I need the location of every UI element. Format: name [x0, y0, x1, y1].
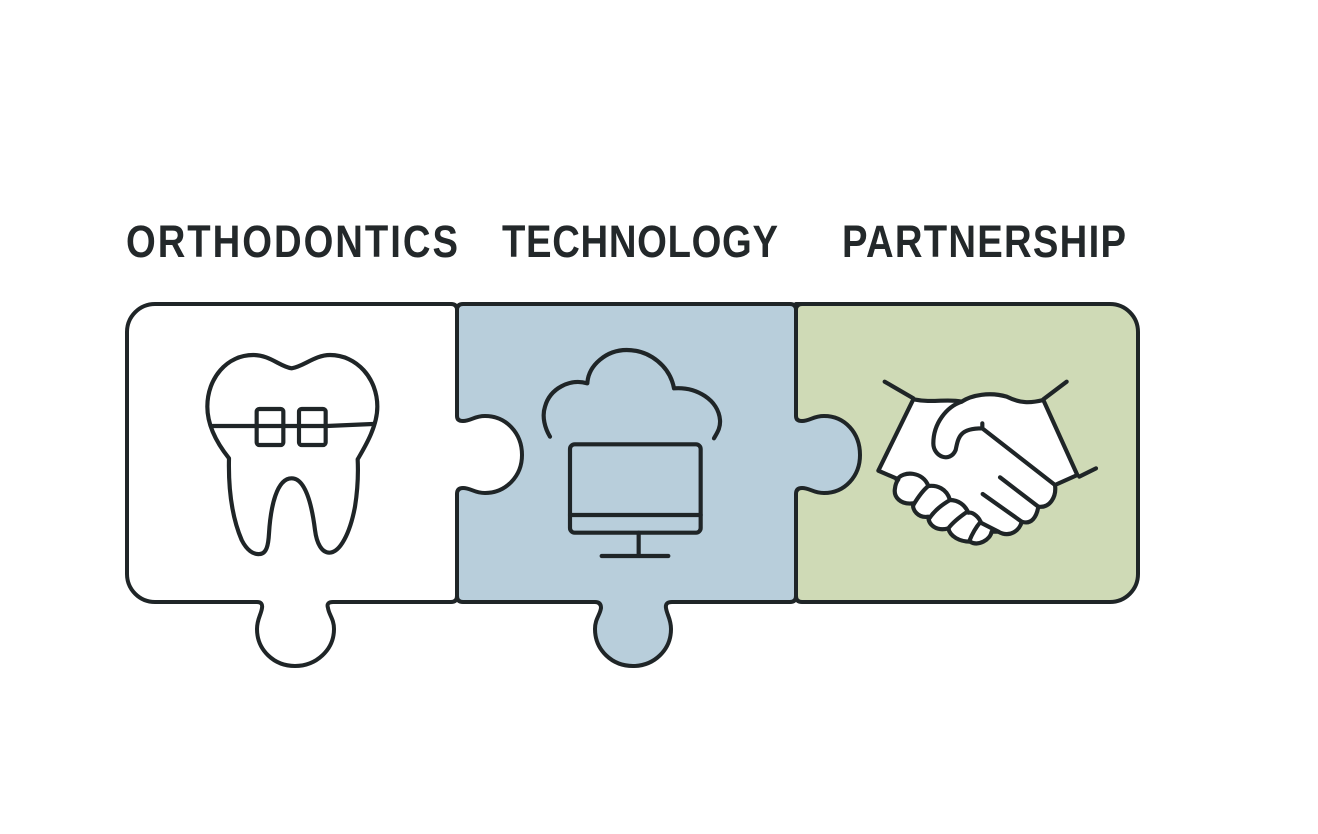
panel: technology puzzle piece — [457, 304, 860, 666]
thumb — [933, 402, 1055, 485]
right cuff line — [1043, 382, 1067, 399]
icon: cloud and monitor — [544, 350, 720, 556]
wire — [213, 424, 373, 426]
icon: handshake — [878, 382, 1096, 543]
left cuff line — [885, 382, 913, 398]
tooth outline — [207, 355, 377, 554]
panel: orthodontics puzzle piece — [127, 304, 522, 666]
panel: partnership puzzle piece — [796, 304, 1138, 602]
heading: orthodontics: ORTHODONTICS — [126, 216, 458, 267]
cloud outline — [544, 350, 720, 438]
icon: tooth with braces — [207, 355, 377, 554]
monitor chin line — [570, 509, 701, 521]
bracket right — [299, 409, 326, 445]
monitor screen — [570, 444, 701, 533]
finger lines — [983, 477, 1038, 522]
heading: partnership: PARTNERSHIP — [842, 216, 1126, 267]
left knuckles — [897, 474, 998, 541]
monitor stand — [602, 533, 668, 556]
lower right cuff line — [1079, 468, 1096, 477]
headings row — [126, 216, 1126, 267]
hands fill and outline — [878, 394, 1077, 543]
heading: technology: TECHNOLOGY — [502, 216, 778, 267]
bracket left — [257, 409, 283, 445]
